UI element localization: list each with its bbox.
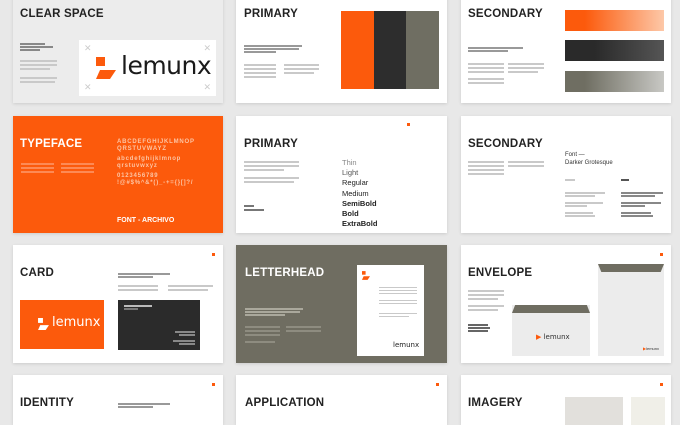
font name: Font — xyxy=(565,152,585,158)
dark business card xyxy=(118,300,200,350)
heading: application: APPLICATION xyxy=(245,397,324,409)
heading: primary: PRIMARY xyxy=(244,138,298,150)
panel: card xyxy=(13,245,223,363)
colour swatches xyxy=(341,11,439,89)
orange business card xyxy=(20,300,104,349)
font name xyxy=(565,152,613,166)
envelope front: ▶ lemunx xyxy=(536,333,570,341)
heading: letterhead: LETTERHEAD xyxy=(245,267,324,279)
text block xyxy=(20,43,57,83)
panel: application xyxy=(236,375,447,425)
weight list: Medium xyxy=(342,189,369,198)
weight list: Light xyxy=(342,168,358,177)
logo clear space box xyxy=(79,40,216,96)
logo wordmark: lemunx xyxy=(121,51,211,80)
heading: secondary: SECONDARY xyxy=(468,138,543,150)
heading: clear space: CLEAR SPACE xyxy=(20,8,104,20)
logo clear space box: ✕ xyxy=(203,43,211,53)
heading: typeface: TYPEFACE xyxy=(20,138,82,150)
heading: card: CARD xyxy=(20,267,54,279)
letterhead sheet: lemunx xyxy=(393,341,419,349)
font name: FONT - ARCHIVO xyxy=(117,217,174,224)
panel: envelope xyxy=(461,245,671,363)
orange business card: lemunx xyxy=(52,315,100,330)
icon: logo mark xyxy=(96,57,116,79)
letterhead sheet xyxy=(357,265,424,356)
glyph specimen: 0123456789 xyxy=(117,173,158,179)
panel: primary colours xyxy=(236,0,447,103)
glyph specimen: !@#$%^&*()_-+={}[]?/ xyxy=(117,180,193,186)
envelope front xyxy=(512,305,590,356)
heading: imagery: IMAGERY xyxy=(468,397,523,409)
logo clear space box: ✕ xyxy=(84,82,92,92)
weight list: ExtraBold xyxy=(342,219,377,228)
glyph specimen xyxy=(117,138,195,186)
heading: primary: PRIMARY xyxy=(244,8,298,20)
envelope back: ▶lemunx xyxy=(643,346,659,351)
panel: primary typeface weights xyxy=(236,116,447,233)
panel: imagery xyxy=(461,375,671,425)
glyph specimen: QRSTUVWAYZ xyxy=(117,146,167,152)
panel: typeface xyxy=(13,116,223,233)
weight list: Regular xyxy=(342,178,368,187)
envelope back xyxy=(598,264,664,356)
heading: identity: IDENTITY xyxy=(20,397,74,409)
panel: clear space xyxy=(13,0,223,103)
logo clear space box: ✕ xyxy=(84,43,92,53)
weight list: Bold xyxy=(342,209,359,218)
gradient bars xyxy=(565,10,664,92)
photo placeholders xyxy=(565,397,623,425)
weight list: SemiBold xyxy=(342,199,377,208)
panel: secondary colours xyxy=(461,0,671,103)
panel: identity xyxy=(13,375,223,425)
weight list xyxy=(342,158,377,228)
heading: secondary: SECONDARY xyxy=(468,8,543,20)
panel: letterhead xyxy=(236,245,447,363)
panel: secondary typeface xyxy=(461,116,671,233)
glyph specimen: ABCDEFGHIJKLMNOP xyxy=(117,139,195,145)
glyph specimen: qrstuvwxyz xyxy=(117,162,158,168)
weight list: Thin xyxy=(342,158,357,167)
glyph specimen: abcdefghijklmnop xyxy=(117,156,181,162)
specimen xyxy=(565,179,663,217)
logo clear space box: ✕ xyxy=(203,82,211,92)
heading: envelope: ENVELOPE xyxy=(468,267,532,279)
font name: Darker Grotesque xyxy=(565,160,613,166)
